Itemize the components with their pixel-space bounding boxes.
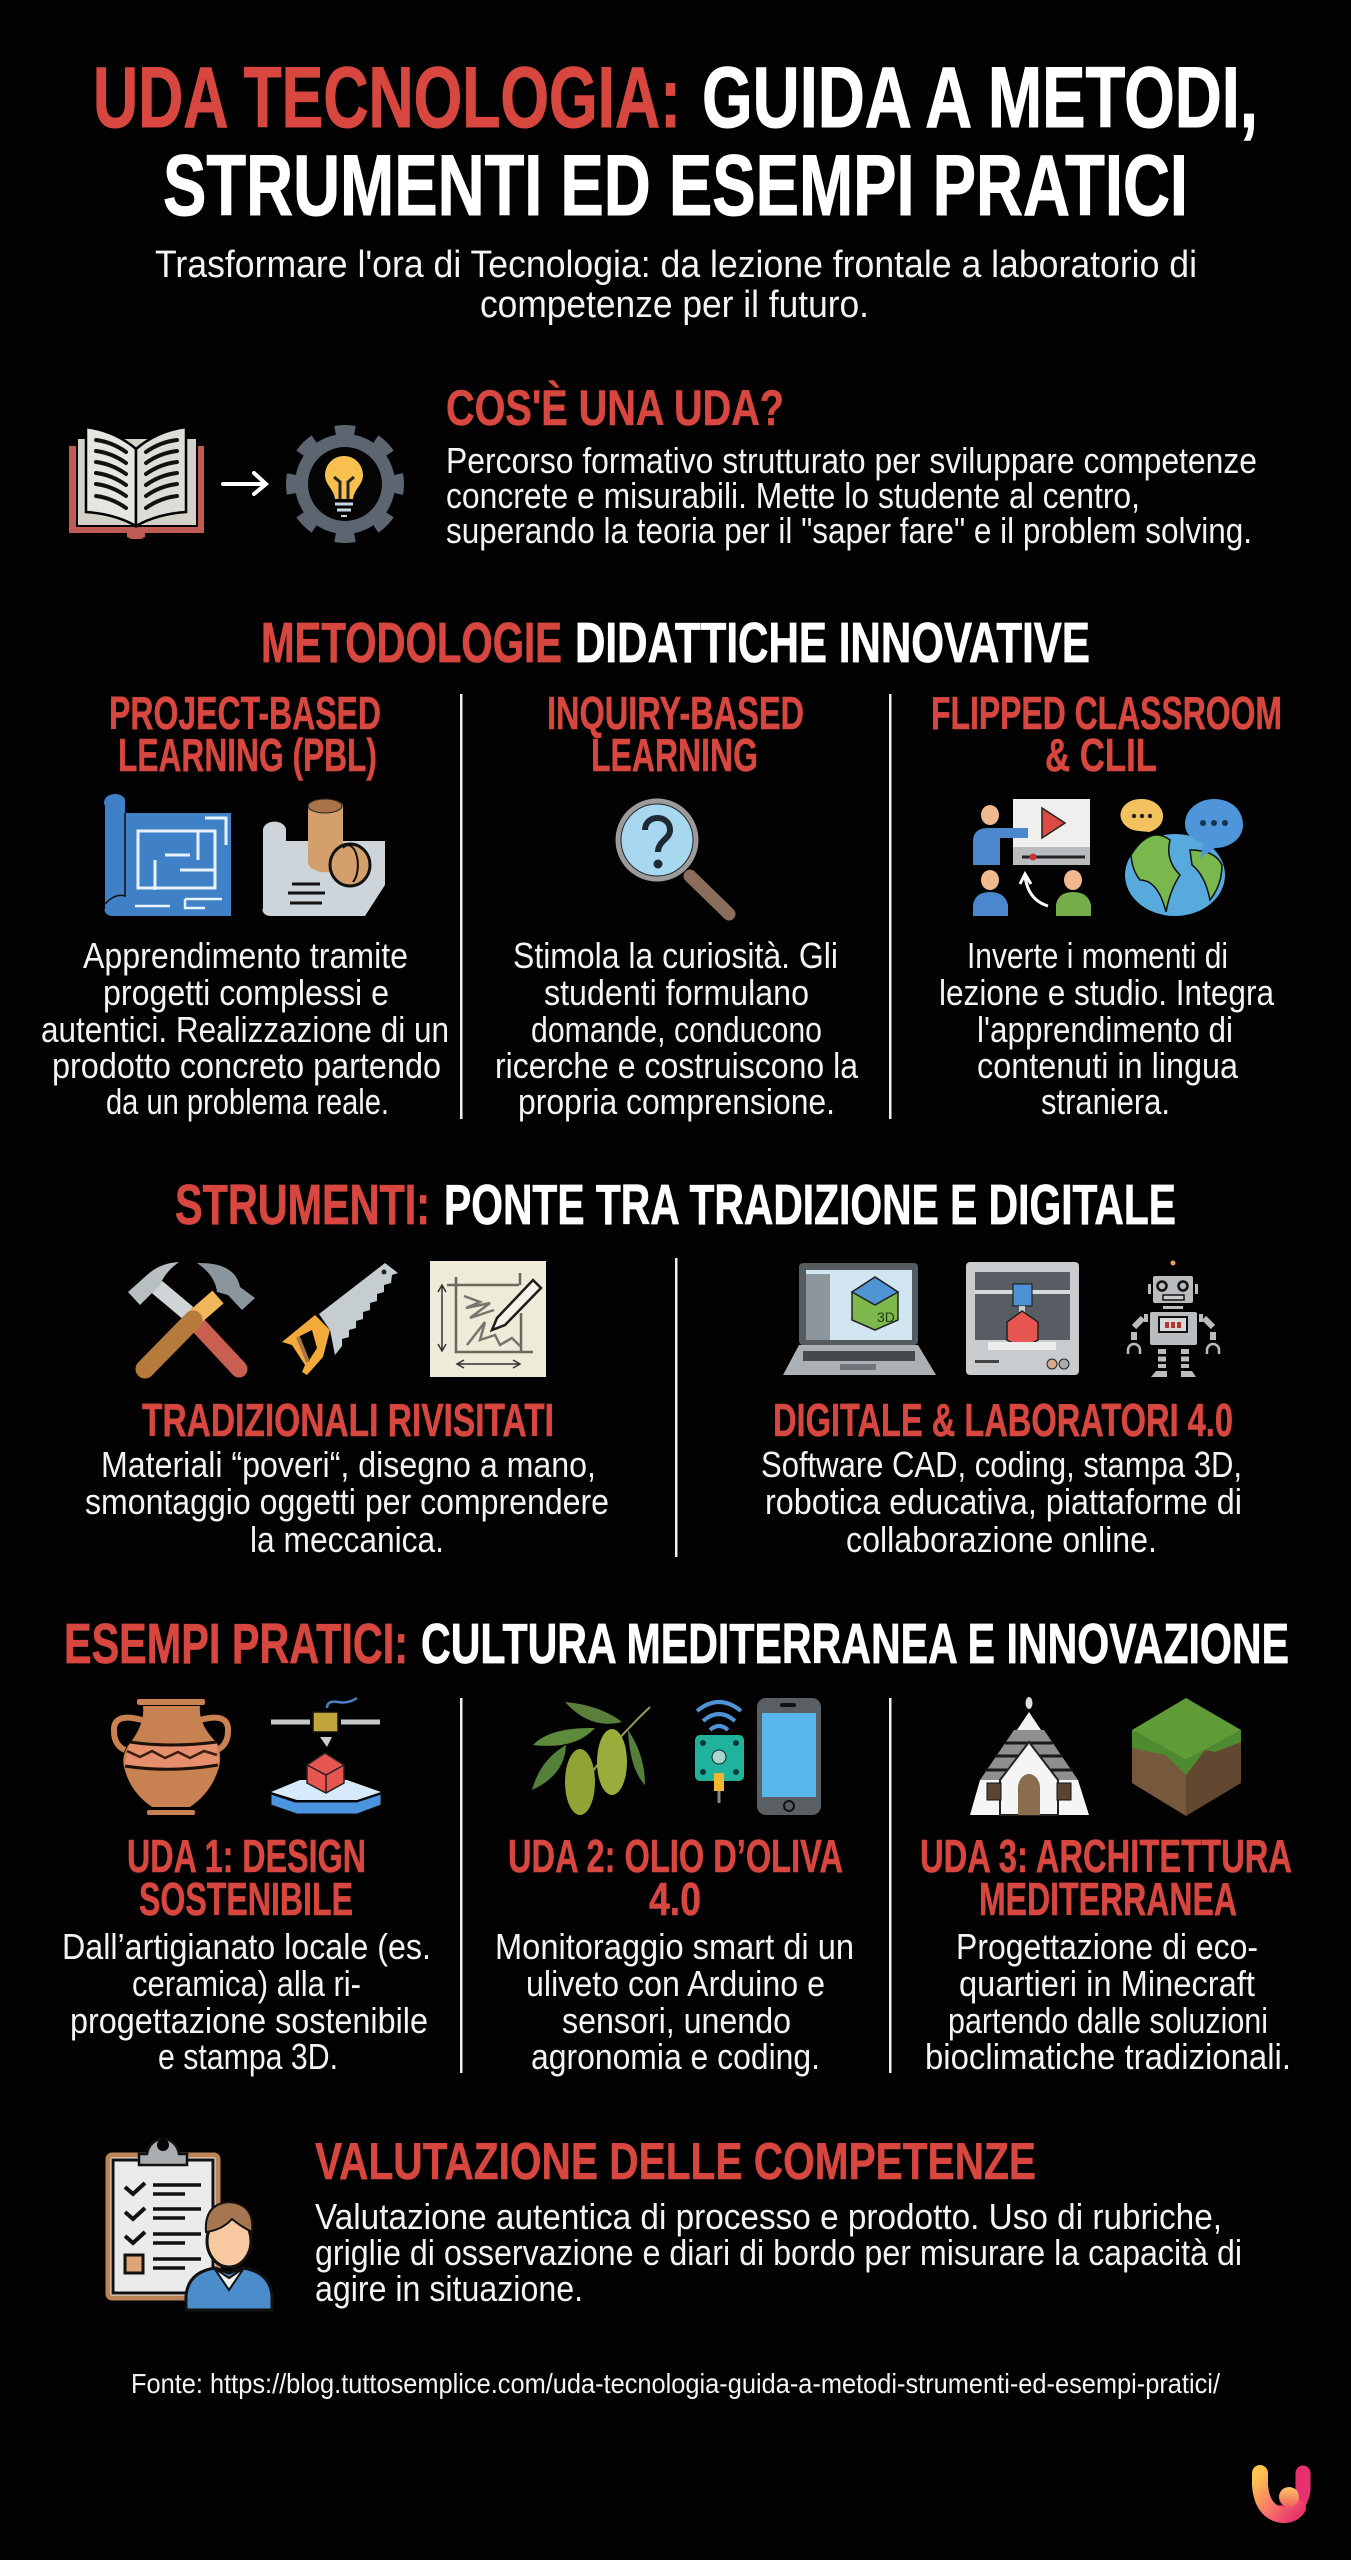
- text: UDA 3 description: bioclimatiche tradizionali.: [925, 2036, 1291, 2077]
- text: inquiry description: studenti formulano: [544, 972, 809, 1013]
- text: definition: [446, 440, 1257, 551]
- icon: technical drawing: [430, 1261, 546, 1377]
- text: PBL description: da un problema reale.: [106, 1081, 389, 1122]
- text: digitale description: [761, 1444, 1242, 1560]
- icon: sensor board with wifi: [695, 1702, 744, 1803]
- icon: ceramic vase: [114, 1699, 228, 1815]
- text: flipped description: straniera.: [1041, 1081, 1170, 1122]
- heading: UDA 1: UDA 1: DESIGN: [127, 1830, 366, 1882]
- text: inquiry description: ricerche e costruiscono la: [495, 1045, 859, 1086]
- text: tradizionali description: [85, 1444, 609, 1560]
- heading: inquiry: INQUIRY-BASED: [547, 687, 804, 739]
- panel: valutazione: [108, 2133, 1242, 2310]
- heading: PBL: PROJECT-BASED: [109, 687, 381, 739]
- icon: crossed hammers: [128, 1262, 255, 1369]
- heading: UDA 2: [508, 1830, 843, 1925]
- text: definition: Percorso formativo strutturato per sviluppare competenze: [446, 440, 1257, 481]
- icon: smartphone: [757, 1698, 821, 1815]
- text: UDA 3 description: partendo dalle soluzioni: [948, 2000, 1268, 2041]
- heading: flipped: [931, 687, 1282, 781]
- panel: project-based learning: [41, 687, 449, 1122]
- text: PBL description: autentici. Realizzazione di un: [41, 1009, 449, 1050]
- text: UDA 3 description: [925, 1926, 1291, 2077]
- panel: inquiry-based learning: [495, 687, 859, 1122]
- heading: UDA 2: UDA 2: OLIO D’OLIVA: [508, 1830, 843, 1882]
- icon: logo: [1260, 2473, 1303, 2515]
- text: tradizionali description: la meccanica.: [250, 1519, 444, 1560]
- icon: trullo house: [970, 1697, 1089, 1815]
- panel: UDA 3: [920, 1697, 1292, 2077]
- text: inquiry description: [495, 935, 859, 1122]
- text: valutazione description: [315, 2196, 1242, 2309]
- icon: clipboard and person: [108, 2139, 272, 2310]
- icon: gear with light bulb: [293, 432, 397, 536]
- panel: strumenti tradizionali: [85, 1261, 609, 1560]
- heading: strumenti: [175, 1173, 1176, 1237]
- heading: UDA 3: [920, 1830, 1292, 1925]
- icon: olive branch: [532, 1702, 650, 1815]
- heading: inquiry: [547, 687, 804, 781]
- icon: magnifying glass: [618, 801, 729, 914]
- text: flipped description: [939, 935, 1275, 1122]
- text: valutazione description: Valutazione autentica di processo e prodotto. Uso di rubriche,: [315, 2196, 1222, 2237]
- text: UDA 1 description: e stampa 3D.: [158, 2036, 338, 2077]
- text: flipped description: l'apprendimento di: [977, 1009, 1233, 1050]
- title: [93, 50, 1258, 234]
- heading: UDA 3: MEDITERRANEA: [979, 1873, 1237, 1925]
- icon: plans with wooden model: [263, 799, 385, 916]
- subtitle: competenze per il futuro.: [480, 284, 869, 326]
- heading: tradizionali: TRADIZIONALI RIVISITATI: [142, 1394, 554, 1446]
- text: digitale description: robotica educativa, piattaforme di: [765, 1481, 1242, 1522]
- text: PBL description: progetti complessi e: [103, 972, 389, 1013]
- text: UDA 2 description: [495, 1926, 854, 2077]
- text: UDA 1 description: progettazione sostenibile: [70, 2000, 428, 2041]
- text: inquiry description: propria comprensione.: [518, 1081, 835, 1122]
- text: UDA 1 description: Dall’artigianato locale (es.: [62, 1926, 431, 1967]
- text: flipped description: contenuti in lingua: [977, 1045, 1239, 1086]
- icon: flipped classroom: [973, 799, 1091, 916]
- heading: cos'è una UDA: COS'È UNA UDA?: [446, 380, 784, 436]
- subtitle: Trasformare l'ora di Tecnologia: da lezione frontale a laboratorio di: [155, 244, 1197, 286]
- text: UDA 2 description: agronomia e coding.: [531, 2036, 820, 2077]
- text: flipped description: Inverte i momenti di: [967, 935, 1228, 976]
- heading: strumenti: STRUMENTI:: [175, 1173, 430, 1237]
- heading: valutazione: VALUTAZIONE DELLE COMPETENZE: [315, 2133, 1036, 2191]
- heading: flipped: & CLIL: [1045, 729, 1157, 781]
- text: tradizionali description: smontaggio oggetti per comprendere: [85, 1481, 609, 1522]
- text: inquiry description: domande, conducono: [531, 1009, 822, 1050]
- title: UDA TECNOLOGIA:: [93, 50, 681, 146]
- heading: UDA 1: [127, 1830, 366, 1925]
- icon: blueprint: [104, 794, 231, 916]
- text: definition: concrete e misurabili. Mette lo studente al centro,: [446, 475, 1140, 516]
- text: UDA 2 description: uliveto con Arduino e: [526, 1963, 825, 2004]
- panel: digitale e laboratori: [761, 1260, 1242, 1560]
- panel: UDA 1: [62, 1698, 431, 2077]
- heading: UDA 1: SOSTENIBILE: [139, 1873, 353, 1925]
- icon: robot: [1128, 1260, 1219, 1377]
- source line: Fonte: https://blog.tuttosemplice.com/uda-tecnologia-guida-a-metodi-strumenti-ed-esempi-pratici/: [131, 2368, 1220, 2399]
- heading: UDA 2: 4.0: [649, 1873, 701, 1925]
- panel: UDA 2: [495, 1698, 854, 2077]
- text: UDA 2 description: sensori, unendo: [562, 2000, 791, 2041]
- icon: arrow: [223, 473, 266, 494]
- text: digitale description: Software CAD, coding, stampa 3D,: [761, 1444, 1242, 1485]
- icon: minecraft grass block: [1132, 1698, 1241, 1816]
- heading: PBL: LEARNING (PBL): [118, 729, 377, 781]
- heading: metodologie: DIDATTICHE INNOVATIVE: [575, 611, 1090, 675]
- text: tradizionali description: Materiali “poveri“, disegno a mano,: [101, 1444, 596, 1485]
- heading: esempi pratici: [64, 1612, 1289, 1676]
- text: inquiry description: Stimola la curiosità. Gli: [513, 935, 838, 976]
- heading: metodologie: METODOLOGIE: [261, 611, 562, 675]
- text: UDA 1 description: [62, 1926, 431, 2077]
- heading: inquiry: LEARNING: [591, 729, 758, 781]
- icon: handsaw: [282, 1263, 398, 1375]
- heading: PBL: [109, 687, 381, 781]
- text: PBL description: [41, 935, 449, 1122]
- text: PBL description: prodotto concreto partendo: [52, 1045, 441, 1086]
- icon: laptop with 3D cube: 3D: [877, 1309, 895, 1325]
- subtitle: [155, 244, 1197, 326]
- text: flipped description: lezione e studio. Integra: [939, 972, 1275, 1013]
- text: definition: superando la teoria per il "saper fare" e il problem solving.: [446, 510, 1252, 551]
- text: valutazione description: griglie di osservazione e diari di bordo per misurare la capacità di: [315, 2232, 1242, 2273]
- icon: 3D printer head: [271, 1698, 381, 1814]
- text: UDA 3 description: Progettazione di eco-: [956, 1926, 1258, 1967]
- heading: metodologie: [261, 611, 1090, 675]
- text: UDA 3 description: quartieri in Minecraft: [959, 1963, 1255, 2004]
- icon: 3D printer: [966, 1262, 1079, 1375]
- text: UDA 1 description: ceramica) alla ri-: [132, 1963, 361, 2004]
- heading: esempi pratici: ESEMPI PRATICI:: [64, 1612, 408, 1676]
- panel: flipped classroom and CLIL: [931, 687, 1282, 1122]
- panel: cos'è una UDA: [69, 380, 1257, 551]
- icon: globe with speech bubbles: [1120, 799, 1243, 916]
- icon: laptop with 3D cube: [783, 1263, 936, 1375]
- text: PBL description: Apprendimento tramite: [83, 935, 408, 976]
- text: valutazione description: agire in situazione.: [315, 2268, 583, 2309]
- icon: open book: [69, 427, 204, 539]
- text: digitale description: collaborazione online.: [846, 1519, 1157, 1560]
- text: UDA 2 description: Monitoraggio smart di un: [495, 1926, 854, 1967]
